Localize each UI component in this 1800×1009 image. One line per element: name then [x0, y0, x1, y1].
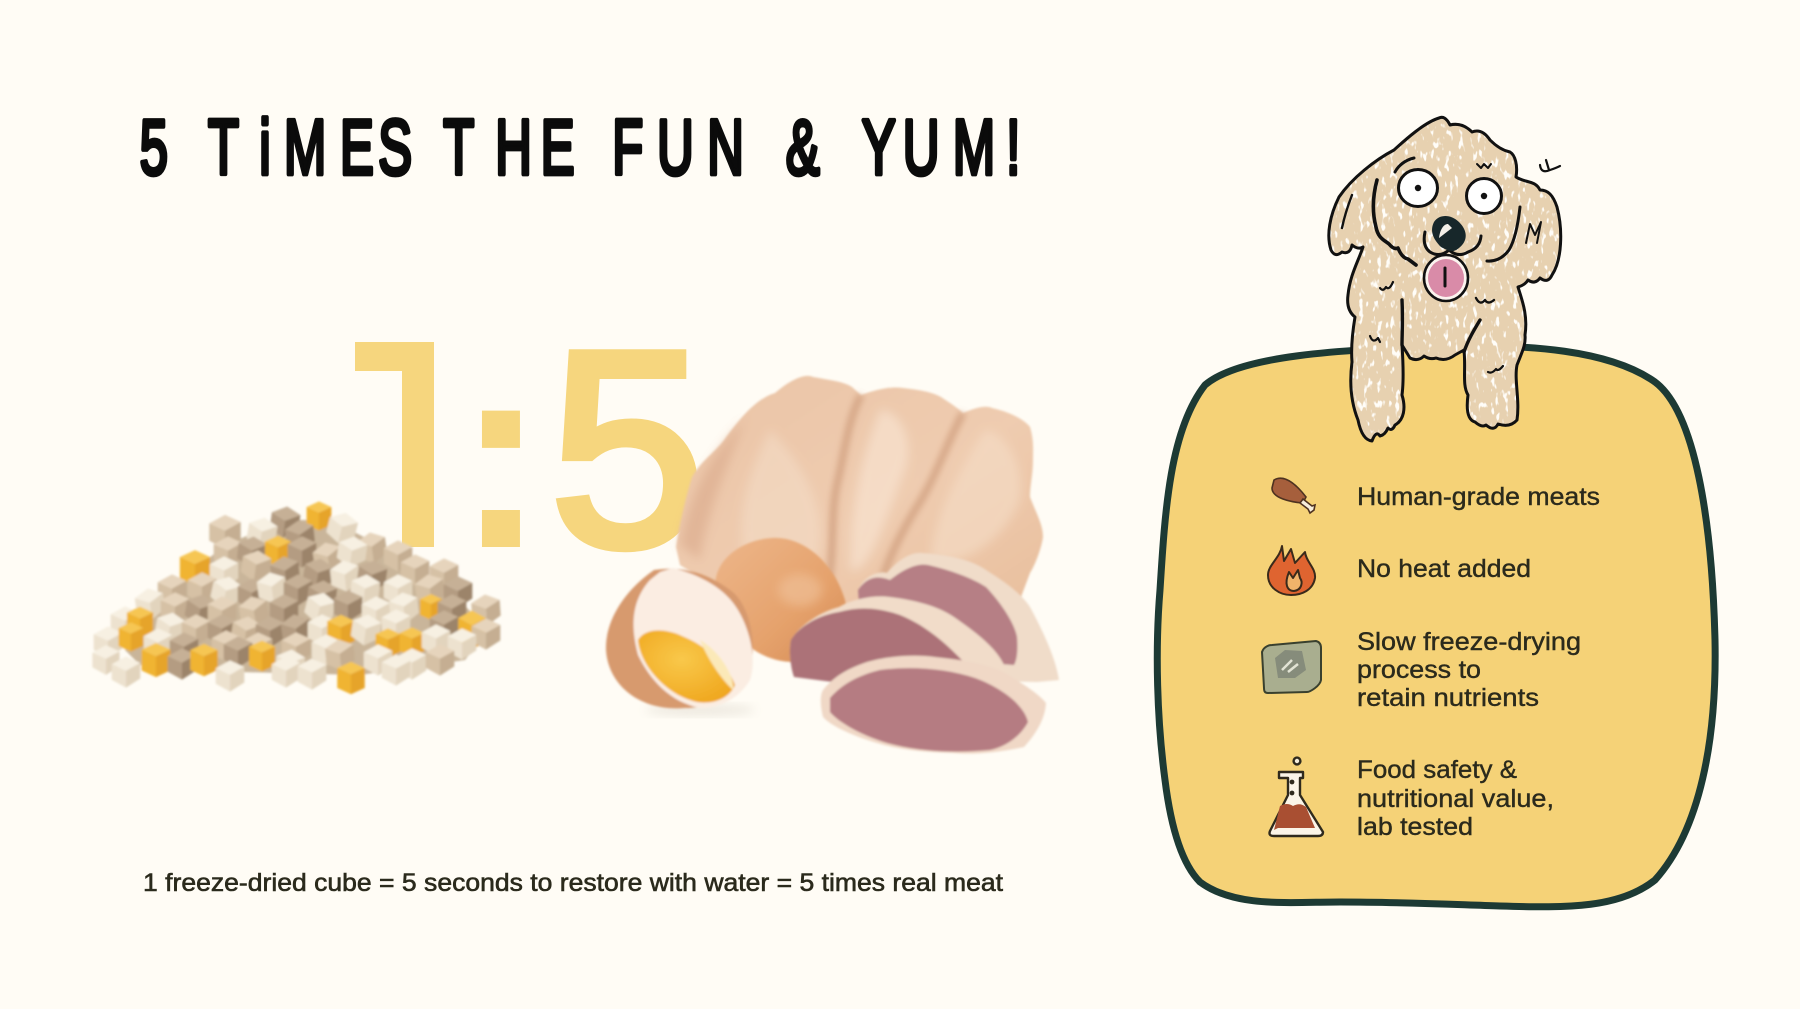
illustration: dog: [1320, 110, 1570, 450]
title: THE: [443, 103, 575, 191]
text: slow freeze-drying: process to: [1357, 656, 1481, 684]
chicken breast: [676, 376, 1043, 620]
cracked egg with yolk: [606, 568, 753, 708]
text: slow freeze-drying: [1357, 628, 1581, 712]
nose: [1432, 216, 1466, 251]
icon: ice cube: [1262, 641, 1321, 693]
text: food safety: [1357, 756, 1554, 841]
big ratio 1:5: 1: [311, 287, 471, 609]
duck breast slices: [790, 553, 1059, 754]
text: food safety: lab tested: [1357, 813, 1473, 841]
eyes: [1398, 170, 1438, 206]
big ratio 1:5: [355, 342, 696, 552]
text: slow freeze-drying: retain nutrients: [1357, 684, 1539, 712]
caption: 1 freeze-dried cube = 5 seconds to restore with water = 5 times real meat: [143, 869, 1003, 897]
title: &: [786, 103, 820, 191]
big ratio 1:5: :: [456, 304, 546, 605]
whole egg: [715, 538, 847, 662]
tongue: [1424, 255, 1468, 301]
text: no heat added: No heat added: [1357, 555, 1531, 583]
egg shadow: [645, 704, 755, 716]
panel: benefits card: [1157, 346, 1715, 907]
text: food safety: nutritional value,: [1357, 785, 1554, 813]
title: TiMES: [208, 103, 412, 191]
icon: drumstick: [1272, 478, 1315, 513]
freeze-dried cube pile: [92, 501, 501, 694]
icon: flame: [1268, 546, 1315, 595]
text: food safety: Food safety &: [1357, 756, 1517, 784]
text: slow freeze-drying: Slow freeze-drying: [1357, 628, 1581, 656]
back slice: [858, 553, 1059, 682]
front slice: [821, 656, 1046, 754]
title: YUM!: [862, 103, 1020, 191]
title: 5: [140, 103, 168, 191]
middle slice: [790, 596, 1005, 690]
title: FUN: [612, 103, 744, 191]
big ratio 1:5: 5: [550, 293, 705, 604]
icon: lab flask: [1270, 758, 1323, 836]
ear and face lines: [1342, 158, 1560, 373]
text: human-grade meats: Human-grade meats: [1357, 483, 1600, 511]
